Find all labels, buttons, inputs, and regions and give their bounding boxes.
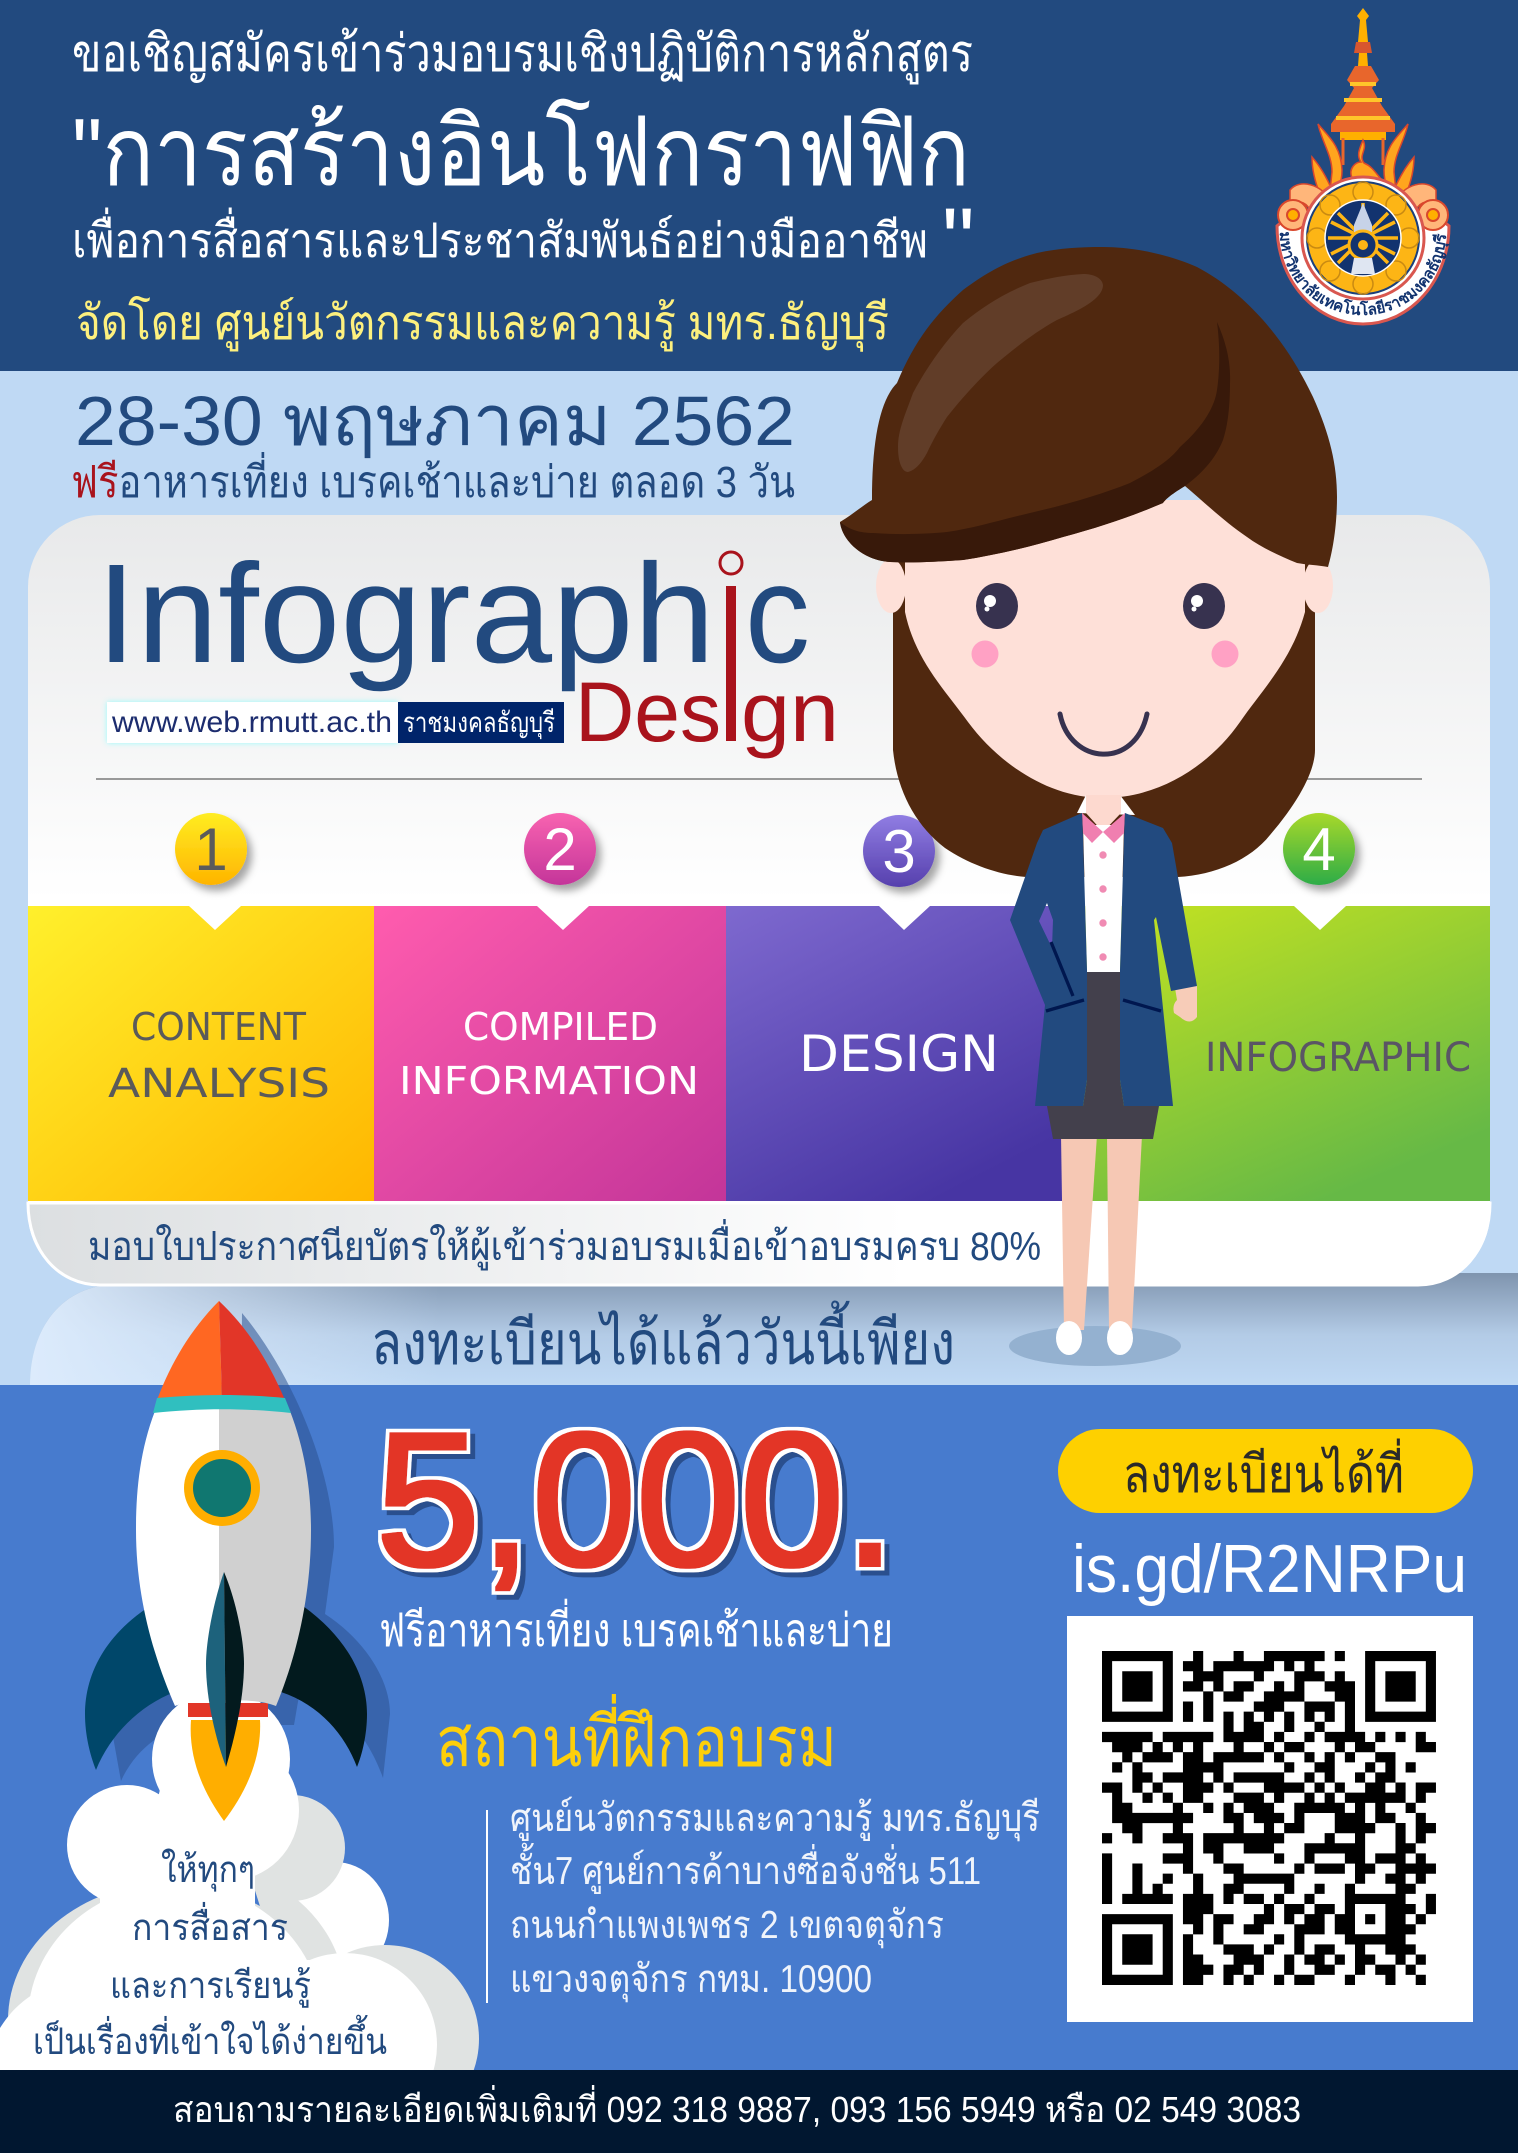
venue heading: สถานที่ฝึกอบรม: [436, 1694, 837, 1781]
subtitle: เพื่อการสื่อสารและประชาสัมพันธ์อย่างมืออาชีพ: [72, 207, 928, 268]
character: woman: [840, 247, 1337, 1366]
panel: design: DESIGN: [799, 1025, 999, 1083]
heading: Design: Des: [575, 665, 721, 759]
smile: [1060, 714, 1147, 754]
website tag: www.web.rmutt.ac.th: [111, 706, 392, 739]
step badge 3: [863, 815, 935, 887]
website tag: ราชมงคลธัญบุรี: [403, 707, 555, 740]
footer bar: [0, 2070, 1518, 2153]
ribbon: [1277, 215, 1449, 324]
logo curved name: มหาวิทยาลัยเทคโนโลยีราชมงคลธัญบุรี: [1280, 232, 1450, 316]
invitation line: ขอเชิญสมัครเข้าร่วมอบรมเชิงปฏิบัติการหลักสูตร: [72, 25, 973, 85]
icon: university logo: [1276, 8, 1450, 326]
heading: Infographic: c: [745, 534, 810, 692]
panel: design: [726, 906, 1070, 1201]
cloud text: การสื่อสาร: [132, 1901, 288, 1948]
main hair: [840, 247, 1337, 567]
panel: content analysis: CONTENT: [131, 1005, 307, 1049]
shirt: [1082, 813, 1125, 972]
step badge 2: [524, 813, 596, 885]
registration heading: ลงทะเบียนได้แล้ววันนี้เพียง: [371, 1300, 955, 1377]
venue address: [486, 1796, 1040, 2003]
spire: [1331, 8, 1395, 165]
skirt: [1047, 965, 1159, 1139]
teal band: [153, 1395, 291, 1413]
date: 28-30 พฤษภาคม 2562: [75, 382, 795, 460]
nozzle: [188, 1703, 268, 1717]
rocket shadow: [110, 1313, 390, 1781]
step badge 4: 4: [1302, 816, 1336, 883]
panel: compiled information: COMPILED: [463, 1005, 658, 1049]
cloud text: และการเรียนรู้: [110, 1965, 311, 2008]
panel: infographic: [1070, 906, 1490, 1201]
hand: [1173, 985, 1197, 1022]
short url: is.gd/R2NRPu: [1072, 1531, 1467, 1607]
venue address: ถนนกำแพงเพชร 2 เขตจตุจักร: [510, 1904, 944, 1949]
back hair: [893, 540, 1315, 877]
ground shadow: [1009, 1326, 1181, 1366]
panel: compiled information: INFORMATION: [399, 1059, 699, 1103]
heading: Design: gn: [741, 665, 839, 759]
venue address: แขวงจตุจักร กทม. 10900: [510, 1958, 872, 2003]
jacket pockets: [1046, 942, 1161, 1011]
registration pill: [1058, 1429, 1473, 1513]
QR code: [1067, 1616, 1473, 2022]
cheeks: [972, 640, 1238, 668]
step badge 2: 2: [543, 816, 577, 883]
card shadow band: [30, 1273, 1518, 1385]
price: 5,000.: [376, 1394, 896, 1606]
cloud text: เป็นเรื่องที่เข้าใจได้ง่ายขึ้น: [33, 2014, 387, 2062]
side flowers: [1278, 200, 1448, 230]
naga ornaments: [1290, 124, 1436, 210]
price note: ฟรีอาหารเที่ยง เบรคเช้าและบ่าย: [379, 1598, 893, 1656]
footer contact text: สอบถามรายละเอียดเพิ่มเติมที่ 092 318 9887, 093 156 5949 หรือ 02 549 3083: [173, 2085, 1301, 2130]
shoes: [1056, 1321, 1133, 1355]
left fin: [85, 1608, 175, 1770]
panel: content analysis: [28, 906, 374, 1201]
medallion: [1302, 177, 1424, 299]
flame: [191, 1720, 260, 1821]
window: [184, 1450, 260, 1526]
title block: [72, 25, 975, 352]
panel: content analysis: ANALYSIS: [108, 1061, 330, 1107]
heading: Infographic: Infograph: [96, 534, 715, 692]
step badge 1: 1: [194, 816, 228, 883]
right fin: [281, 1606, 367, 1767]
venue address: ศูนย์นวัตกรรมและความรู้ มทร.ธัญบุรี: [510, 1796, 1040, 1842]
face: [876, 500, 1333, 798]
free meals note: ฟรีอาหารเที่ยง เบรคเช้าและบ่าย ตลอด 3 วัน: [71, 451, 795, 507]
panel: compiled information: [374, 906, 726, 1201]
neck: [1077, 795, 1135, 832]
cloud text: ให้ทุกๆ: [161, 1848, 255, 1892]
panel: infographic: INFOGRAPHIC: [1205, 1035, 1471, 1081]
step badge 1: [175, 813, 247, 885]
lower blue section: [0, 1385, 1518, 2070]
icon: rocket: [0, 1301, 479, 2153]
organiser: จัดโดย ศูนย์นวัตกรรมและความรู้ มทร.ธัญบุรี: [76, 295, 889, 352]
certificate band: [28, 1203, 1490, 1285]
smoke cloud: [0, 1700, 479, 2070]
website tag: [107, 702, 564, 743]
step badge 4: [1283, 813, 1355, 885]
centre fin: [206, 1572, 244, 1767]
eyes: [976, 583, 1225, 629]
panel: white card: [28, 515, 1490, 1285]
certificate band: มอบใบประกาศนียบัตรให้ผู้เข้าร่วมอบรมเมื่อเข้าอบรมครบ 80%: [88, 1219, 1041, 1270]
closing quote: ": [942, 190, 975, 292]
venue address: ชั้น7 ศูนย์การค้าบางซื่อจังชั่น 511: [510, 1842, 981, 1894]
step badge 3: 3: [882, 818, 916, 885]
jacket: [1010, 813, 1197, 1106]
nose cone: [157, 1301, 285, 1400]
header band: [0, 0, 1518, 371]
main title: "การสร้างอินโฟกราฟฟิก: [72, 99, 970, 206]
registration pill: ลงทะเบียนได้ที่: [1123, 1438, 1404, 1504]
red letter i: [720, 552, 742, 741]
legs: [1061, 1135, 1142, 1330]
body: [136, 1406, 311, 1706]
cloud text: [33, 1848, 387, 2062]
